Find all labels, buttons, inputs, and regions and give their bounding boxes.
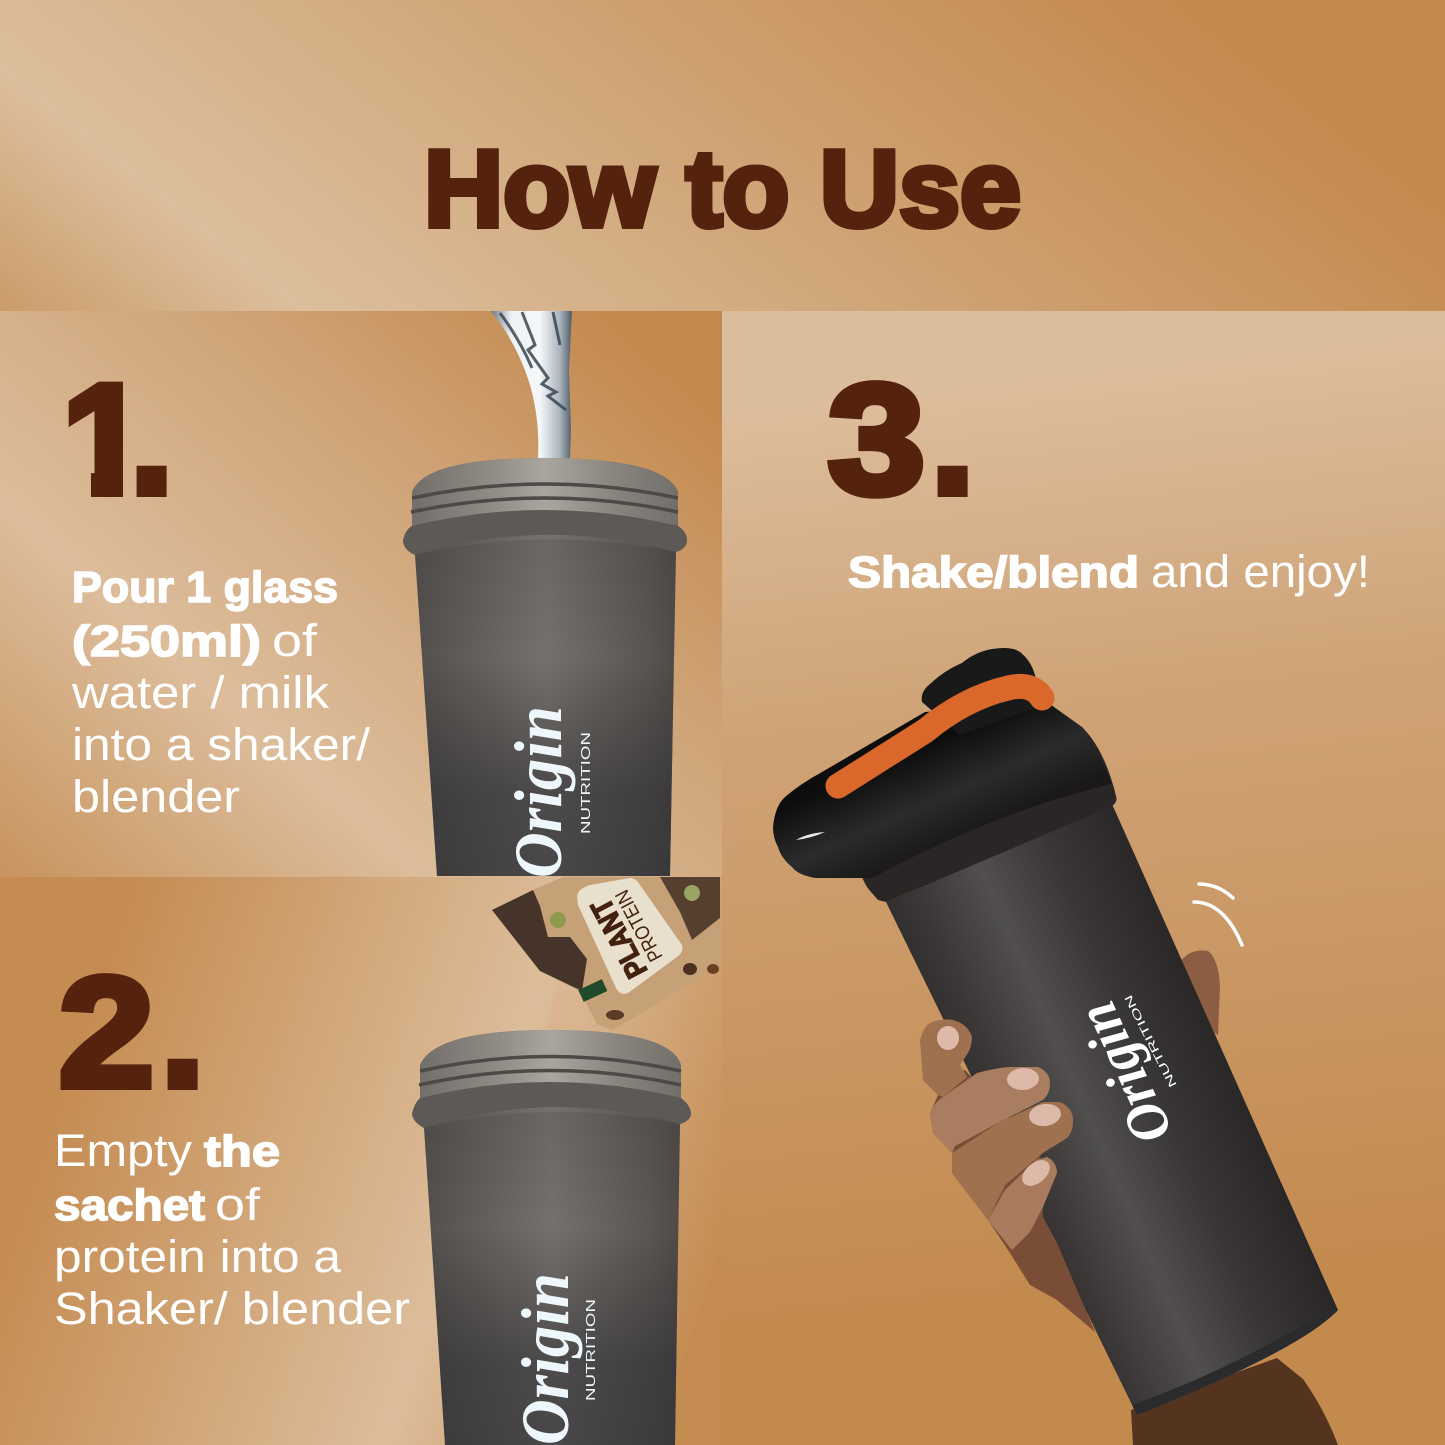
icon: shake motion arcs (1194, 884, 1242, 945)
step 1 instructions: (250ml) (72, 617, 261, 666)
panel: step 2 (54, 877, 720, 1445)
panel: step 3 background (722, 311, 1445, 1445)
step number 2 (59, 946, 204, 1120)
step 2 instructions (54, 1125, 410, 1334)
panel: step 2 background (0, 877, 722, 1445)
step number 1: 1 (62, 353, 149, 527)
finger 3 (952, 1102, 1073, 1220)
orange strap (838, 686, 1042, 786)
step 1 instructions: of (272, 615, 318, 666)
step number 2: 2 (59, 946, 154, 1120)
panel: step 3 (773, 353, 1370, 1445)
step number 3 (828, 353, 974, 527)
step number 3: . (931, 353, 974, 527)
icon: water stream (491, 311, 572, 458)
step 1 instructions: water / milk (71, 667, 330, 718)
shaker cup 1 (403, 458, 687, 878)
step 1 instructions: into a shaker/ (72, 719, 371, 770)
shaker bottle 3 (773, 648, 1338, 1415)
panel: step 1 background (0, 311, 722, 877)
step number 1: . (130, 353, 173, 527)
step 3 instructions (848, 546, 1370, 597)
sachet label text: PLANT (585, 893, 654, 983)
sachet label text: PROTEIN (611, 886, 667, 965)
step 1 instructions: Pour 1 glass (72, 563, 338, 612)
handle glint (796, 832, 825, 840)
palm (923, 1070, 1095, 1332)
fingernails (937, 1026, 1062, 1191)
logo: Origin Nutrition on cup 1: NUTRITION (578, 732, 593, 834)
shaker cup 2 (412, 1030, 691, 1445)
step 2 instructions: sachet (54, 1181, 205, 1230)
step 1 instructions: blender (72, 771, 240, 822)
step number 2: . (161, 946, 204, 1120)
icon: protein powder (546, 990, 590, 1030)
logo: Origin Nutrition on cup 2: Origin (507, 1273, 583, 1445)
step 3 instructions: and enjoy! (1151, 546, 1370, 597)
step 3 instructions: Shake/blend (848, 548, 1139, 597)
finger 1 (920, 1019, 972, 1097)
step 2 instructions: the (204, 1127, 280, 1176)
title: How to Use (424, 128, 1021, 250)
logo: Origin Nutrition on cup 1: Origin (500, 706, 576, 878)
logo: Origin Nutrition on cup 2: NUTRITION (583, 1299, 598, 1401)
hand in front of bottle: fingers and palm (920, 1019, 1095, 1332)
logo: Origin Nutrition on bottle: NUTRITION (1123, 993, 1180, 1089)
step 2 instructions: Empty (54, 1125, 193, 1176)
step 2 instructions: of (215, 1179, 261, 1230)
sachet of plant protein (492, 877, 720, 1030)
logo: Origin Nutrition on bottle: Origin (1063, 992, 1185, 1154)
finger 4 (988, 1157, 1057, 1250)
step 2 instructions: protein into a (54, 1231, 342, 1282)
bottle lid and handle (773, 702, 1112, 878)
step 2 instructions: Shaker/ blender (54, 1283, 410, 1334)
bottle cap (922, 648, 1044, 735)
panel: header background (0, 0, 1445, 311)
step number 1 (68, 382, 167, 497)
step number 3: 3 (828, 353, 925, 527)
hand behind bottle: thumb and forearm (1131, 950, 1338, 1445)
step 1 instructions (71, 563, 371, 822)
panel: step 1 (62, 311, 687, 878)
finger 2 (930, 1067, 1050, 1153)
